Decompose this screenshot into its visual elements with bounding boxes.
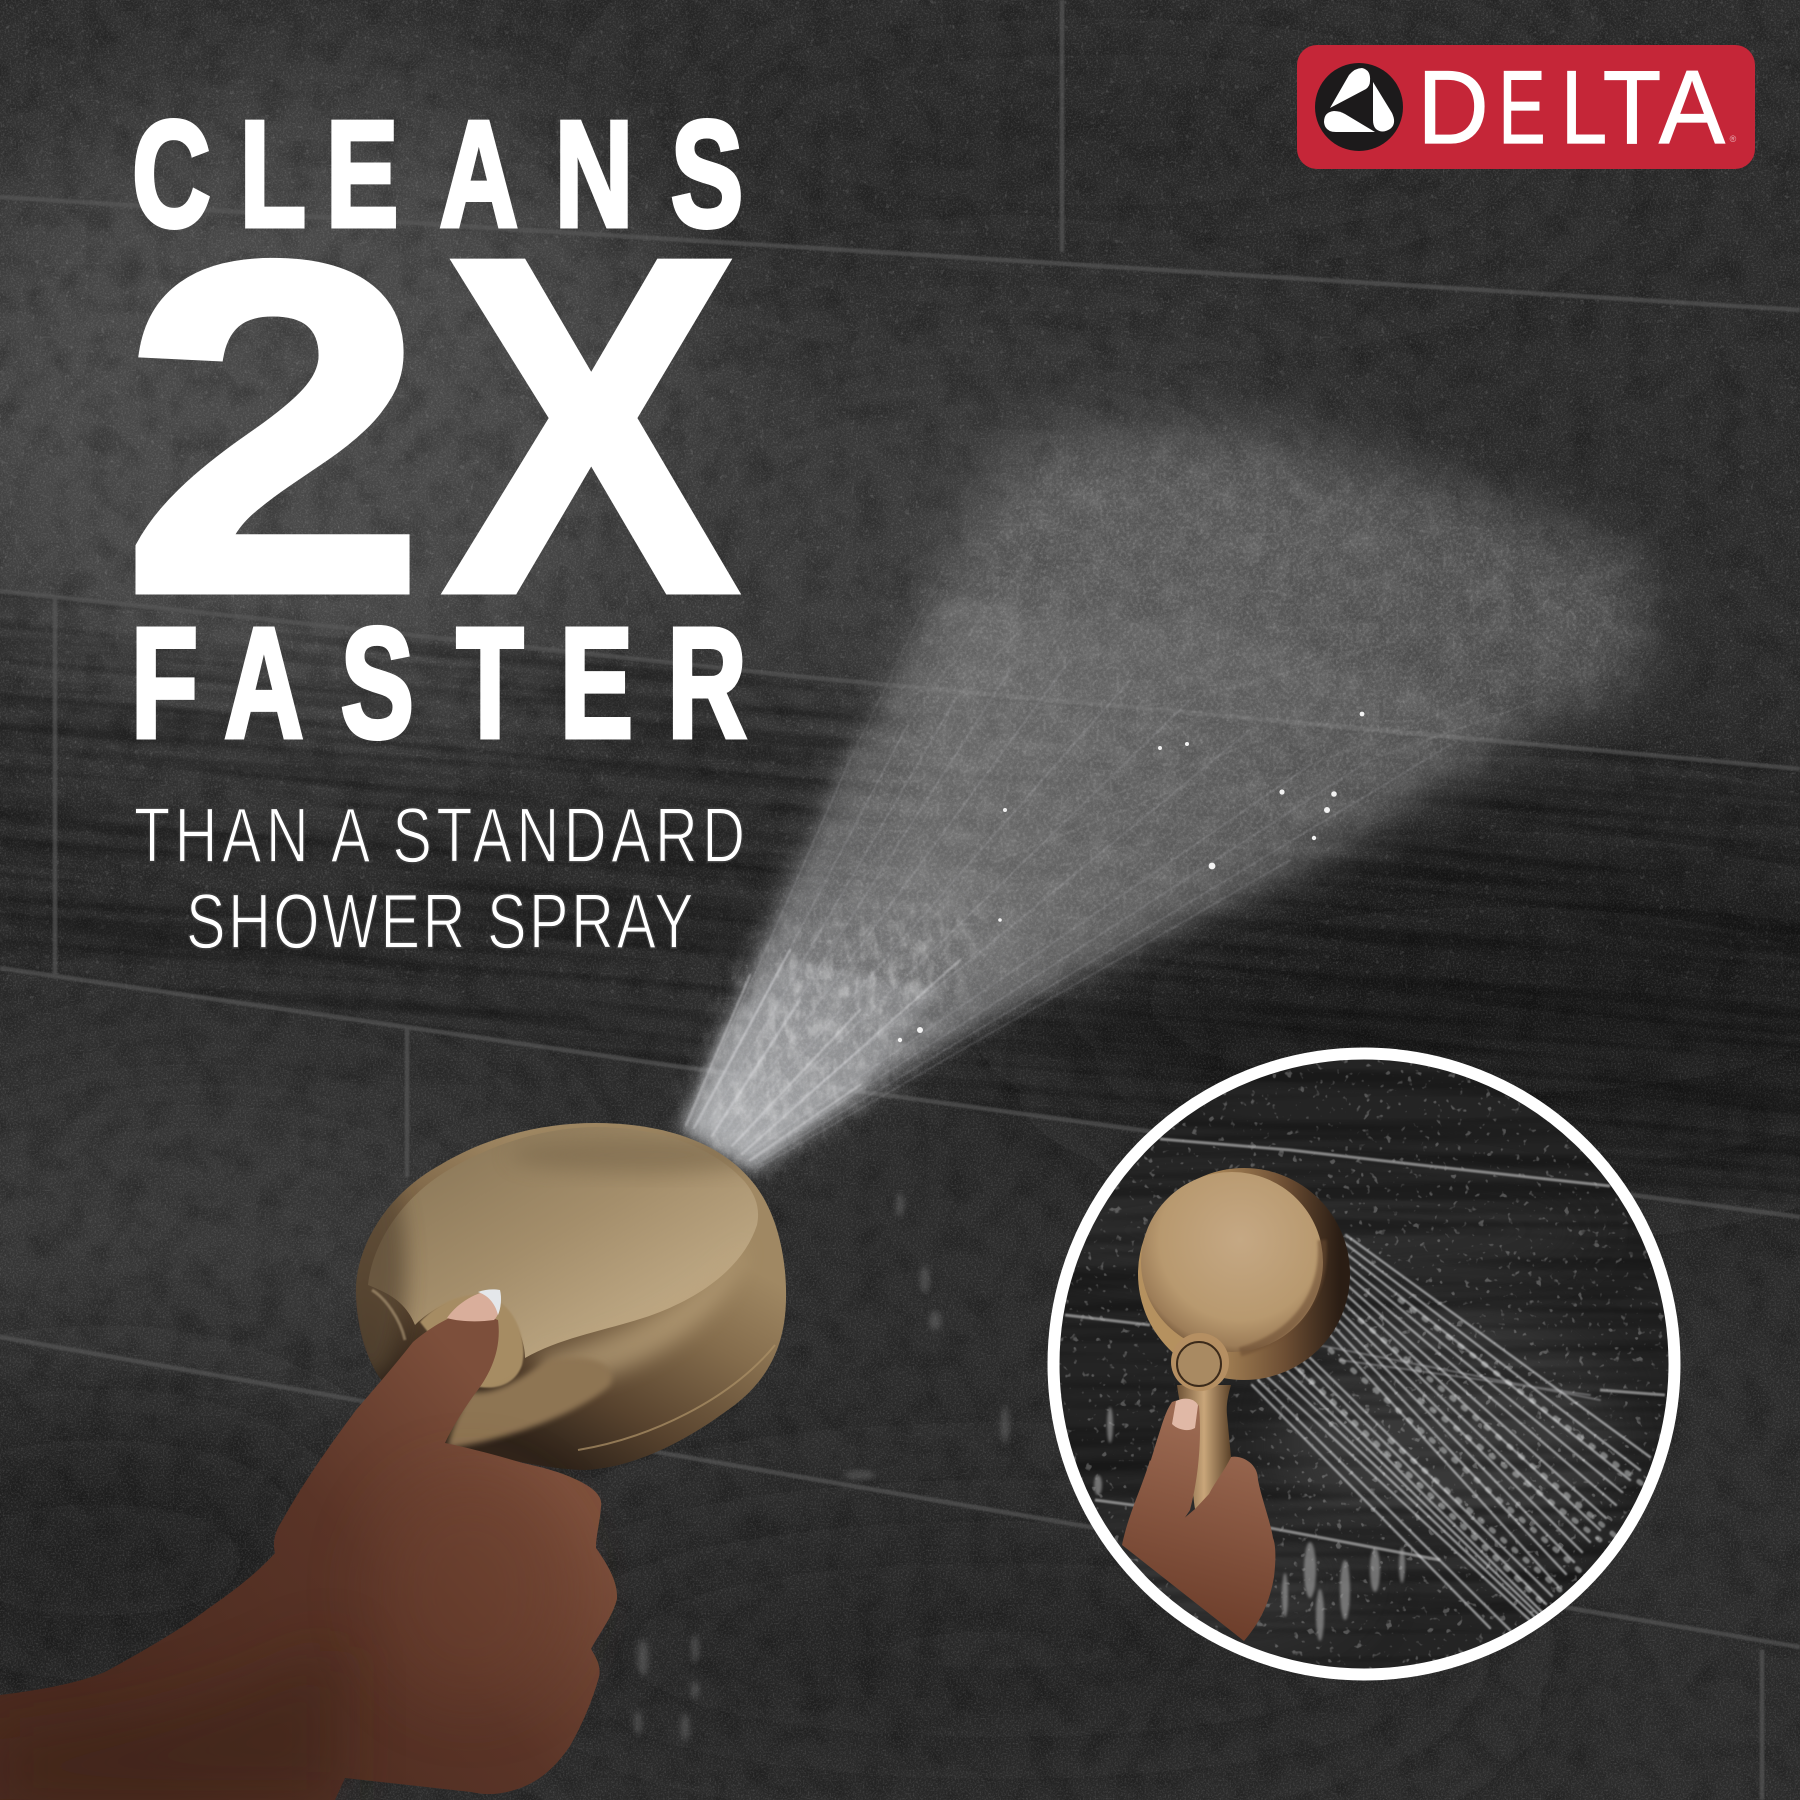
- product: gold hand shower, large view: [338, 1123, 786, 1470]
- nozzle ripple texture: [678, 898, 992, 1180]
- shower head face: [368, 1127, 758, 1358]
- mist cloud: [860, 430, 1640, 976]
- inset background and splashes: [1000, 1050, 1680, 1680]
- bright droplets: [898, 712, 1364, 1042]
- knuckle shading: [370, 1475, 570, 1705]
- jet fan: [683, 600, 1522, 1170]
- inset: circular detail photo: [1000, 1050, 1680, 1680]
- heading: 2X: [120, 158, 741, 692]
- nail tip: [478, 1289, 501, 1315]
- inset hand: [1122, 1457, 1275, 1641]
- inset thumb: [1125, 1399, 1200, 1540]
- spray texture: [688, 413, 1664, 1175]
- inset face crescent highlight: [1240, 1240, 1322, 1352]
- inset spray rays: [1252, 1235, 1650, 1630]
- inset button: [1171, 1333, 1229, 1391]
- logo wordmark: A: [1659, 50, 1725, 166]
- inset thumb nail: [1172, 1399, 1198, 1430]
- logo wordmark: D: [1417, 50, 1489, 166]
- logo wordmark: [1417, 48, 1737, 166]
- logo wordmark: ®: [1730, 134, 1737, 144]
- title text block: [120, 89, 747, 965]
- wrist shadow: [0, 1640, 340, 1800]
- heading: 2X: X: [443, 158, 741, 692]
- left rim highlight: [372, 1290, 405, 1340]
- seam line: [578, 1345, 775, 1450]
- wall drips: [1094, 1407, 1405, 1641]
- highlight on side of head: [535, 1245, 745, 1381]
- nozzle core: [683, 960, 940, 1170]
- spray rays: [686, 565, 1540, 1168]
- inset white ring: [1054, 1054, 1674, 1674]
- logo wordmark: E: [1498, 48, 1546, 165]
- inset handle: [1177, 1385, 1231, 1509]
- heading: 2X: 2: [120, 164, 428, 691]
- subheading: shower spray: SHOWER SPRAY: [186, 877, 694, 965]
- left side shading: [338, 1137, 770, 1380]
- water streaks on wall: [634, 1193, 1009, 1741]
- spray: wide water fan from shower head: [670, 403, 1676, 1184]
- logo: Delta badge: [1297, 45, 1755, 169]
- heading: FASTER: FASTER: [131, 594, 747, 771]
- button ring: [420, 1295, 523, 1388]
- handle neck: [448, 1357, 612, 1448]
- thumb nail: [447, 1290, 501, 1321]
- subheading: than a standard: THAN A STANDARD: [134, 791, 745, 879]
- logo mark: black circle with three white petals: [1315, 63, 1403, 151]
- logo wordmark: L: [1561, 49, 1607, 165]
- shower head body: [356, 1123, 786, 1470]
- hand holding shower: [0, 1289, 617, 1800]
- logo wordmark: T: [1603, 50, 1661, 166]
- inset shower head: [1125, 1168, 1350, 1540]
- heading: CLEANS: CLEANS: [132, 89, 743, 258]
